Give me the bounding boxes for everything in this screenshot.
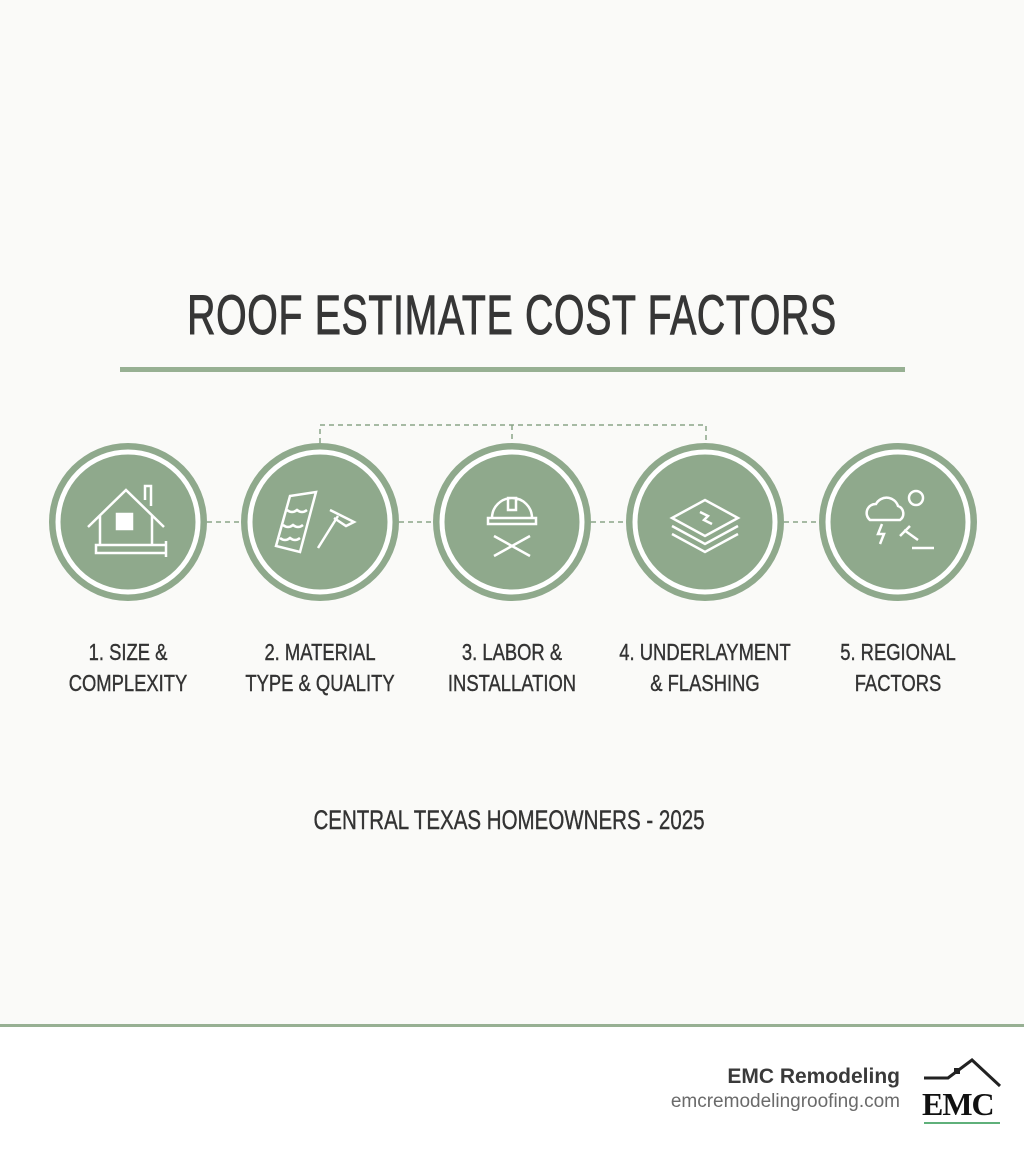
- label 4: 4. UNDERLAYMENT: [619, 639, 791, 665]
- title: ROOF ESTIMATE COST FACTORS: [187, 283, 837, 346]
- label 2: 2. MATERIAL: [264, 639, 376, 665]
- label 5: [840, 639, 956, 696]
- circle 4: underlayment icon: [626, 443, 784, 601]
- label 3: [448, 639, 576, 696]
- circle 5: regional icon: [819, 443, 977, 601]
- footer band: [0, 1024, 1024, 1157]
- label 5: 5. REGIONAL: [840, 639, 956, 665]
- label 3: INSTALLATION: [448, 670, 576, 696]
- label 4: & FLASHING: [650, 670, 760, 696]
- logo: [922, 1058, 1001, 1124]
- label 1: COMPLEXITY: [69, 670, 187, 696]
- logo: EMC: [922, 1086, 994, 1122]
- footer brand text: [671, 1065, 900, 1112]
- subtitle: CENTRAL TEXAS HOMEOWNERS - 2025: [313, 805, 705, 835]
- label 1: [69, 639, 188, 696]
- label 3: 3. LABOR &: [462, 639, 562, 665]
- label 1: 1. SIZE &: [89, 639, 167, 665]
- connectors and circles: [49, 424, 977, 601]
- label 4: [619, 639, 791, 696]
- circle 1: size icon: [49, 443, 207, 601]
- title underline: [120, 367, 905, 372]
- label 2: [245, 639, 395, 696]
- footer brand text: EMC Remodeling: [727, 1065, 900, 1088]
- label 2: TYPE & QUALITY: [245, 670, 395, 696]
- footer brand text: emcremodelingroofing.com: [671, 1091, 900, 1112]
- circle 3: labor icon: [433, 443, 591, 601]
- label 5: FACTORS: [855, 670, 941, 696]
- circle 2: material icon: [241, 443, 399, 601]
